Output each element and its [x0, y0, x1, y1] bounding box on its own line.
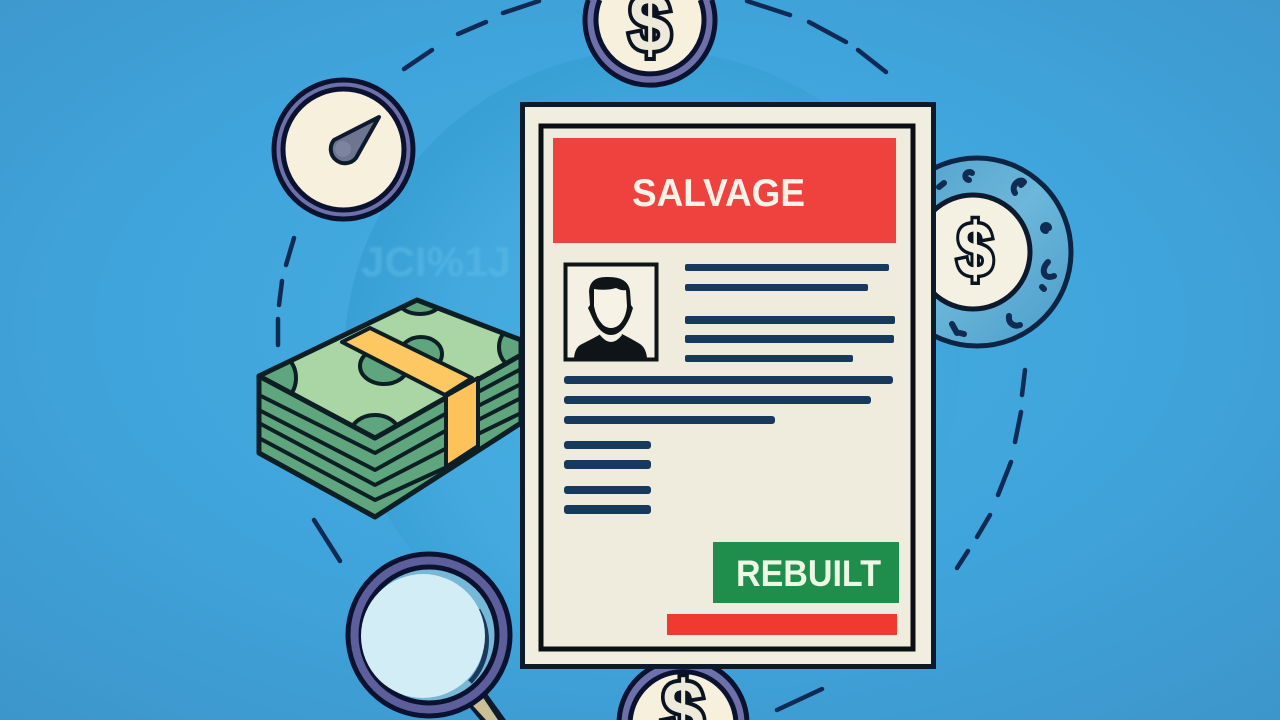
id photo [566, 264, 656, 360]
bill corner spots [264, 302, 518, 435]
salvage banner [553, 138, 896, 243]
bill edge lines [259, 369, 521, 500]
ghost percentage text: JCI%1J [361, 238, 511, 285]
icon: right dollar coin: $ [957, 208, 993, 293]
icon: top dollar coin [585, 0, 715, 85]
icon: magnifying glass [348, 554, 510, 720]
icon: gauge [274, 80, 413, 219]
icon: right dollar coin [883, 158, 1071, 346]
rebuilt stamp [713, 542, 899, 603]
dashed orbit ring [278, 1, 1025, 710]
text lines beside photo [685, 264, 895, 362]
rebuilt stamp: REBUILT [736, 553, 881, 594]
paragraph lines [564, 376, 893, 514]
top face [259, 300, 521, 438]
red footer bar [667, 614, 897, 635]
document [522, 104, 934, 666]
top face outline [259, 300, 521, 438]
paper band [342, 328, 472, 395]
icon: bottom dollar coin [619, 660, 747, 720]
background halo circle [344, 50, 960, 666]
icon: stack of cash [256, 298, 520, 520]
side faces [259, 355, 521, 517]
salvage banner: SALVAGE [632, 172, 805, 215]
